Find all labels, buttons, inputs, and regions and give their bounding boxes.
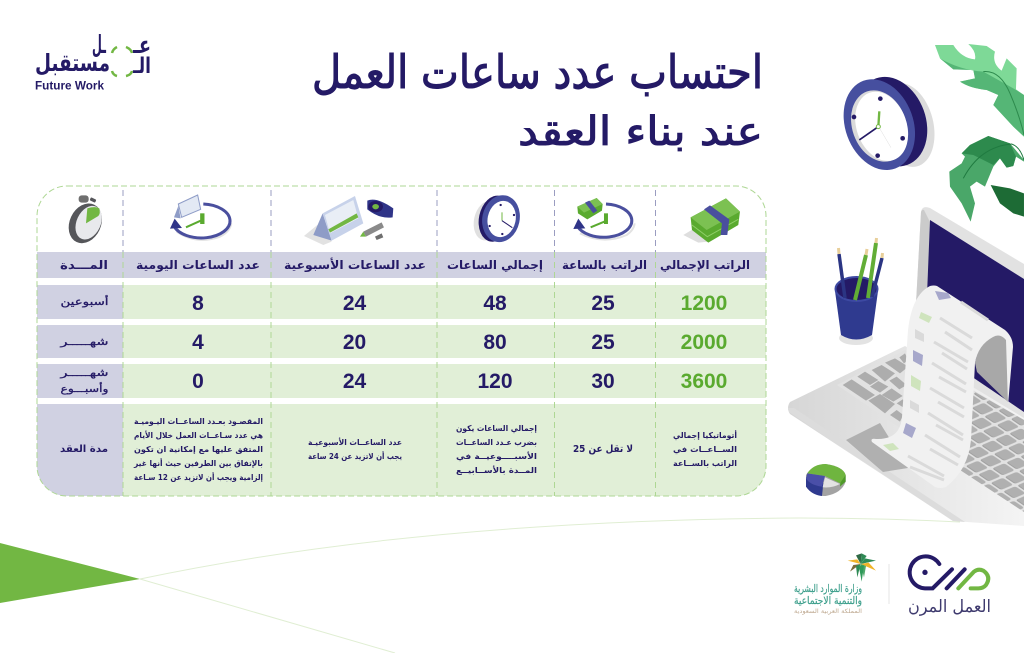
row: contract duration notes: أتوماتيكيا إجمالي — [673, 430, 737, 440]
row: month: 20 — [343, 331, 366, 354]
logo: ministry: المملكة العربية السعودية — [794, 608, 862, 615]
icon: daily hours calendar and arc — [170, 195, 231, 240]
row: contract duration notes: بالإتفاق بين الطرفين حيث أنها غير — [133, 458, 263, 468]
keyboard — [837, 350, 1024, 512]
title: عند بناء العقد — [518, 109, 763, 155]
logo: Future Work: Future Work — [35, 80, 105, 92]
row: two weeks — [60, 292, 727, 315]
icon: wall clock small — [470, 192, 524, 246]
row: month and week: 3600 — [681, 370, 727, 393]
logo: Future Work: عـ — [132, 31, 151, 59]
row: contract duration notes — [60, 417, 737, 482]
column headings: الراتب الإجمالي — [660, 258, 750, 272]
table panel — [37, 186, 766, 496]
row: month and week — [59, 368, 727, 395]
keys left of receipt — [843, 353, 908, 422]
laptop base — [788, 346, 1024, 526]
row: contract duration notes: الأسبــــوعيــة في — [456, 451, 537, 461]
row: contract duration notes: الراتب بالســاعة — [673, 459, 737, 468]
logo: Future Work — [35, 30, 151, 92]
row: month and week: 0 — [192, 370, 204, 393]
illustration: plant leaves — [935, 44, 1024, 222]
row: two weeks: 1200 — [681, 292, 727, 315]
row: contract duration notes: المقصـود بعـدد الساعــات اليـوميـة — [134, 417, 263, 426]
duration column background — [37, 285, 123, 496]
row: contract duration notes: يجب أن لاتزيد عن 24 ساعة — [308, 451, 402, 461]
row: month: شهـــــر — [59, 337, 108, 348]
row: month: 4 — [192, 331, 204, 354]
row: month: 80 — [483, 331, 507, 354]
logo: Future Work: مستقبل — [35, 49, 110, 77]
row: contract duration notes: لا تقل عن 25 — [573, 444, 633, 455]
logo: ministry: وزارة الموارد البشرية — [794, 583, 862, 595]
row: month — [59, 331, 727, 354]
row: contract duration notes: المتفق عليها مع إمكانية ان تكون — [134, 445, 263, 454]
row: contract duration notes: إلزامية ويجب أن لاتزيد عن 12 سـاعة — [134, 472, 263, 482]
logo: ministry — [794, 553, 876, 615]
row: two weeks: 25 — [591, 292, 615, 315]
row: contract duration notes: عدد الساعــات الأسبوعيـة — [308, 437, 402, 447]
row: month and week: 30 — [591, 370, 615, 393]
leaf: lower dark — [991, 185, 1024, 217]
column dashed dividers — [123, 190, 656, 496]
row: contract duration notes: مدة العقد — [60, 444, 108, 455]
logo: Future Work: الـ — [132, 54, 151, 79]
row: month and week: وأسبـــوع — [60, 382, 109, 395]
icon: palm — [848, 553, 876, 582]
leaf: top light — [935, 44, 1024, 137]
icon: weekly hours desk calendar — [304, 196, 393, 245]
row: contract duration notes: الســاعــات في — [673, 445, 737, 454]
title: احتساب عدد ساعات العمل — [312, 45, 763, 99]
logo: Future Work: ـل — [92, 30, 106, 59]
row: month and week: 24 — [343, 370, 366, 393]
decorative green triangle — [0, 543, 140, 603]
title — [312, 45, 763, 155]
illustration: pie chart — [806, 464, 846, 496]
icon: money stack — [683, 198, 740, 243]
receipt text lines — [908, 302, 988, 480]
row: contract duration notes: هي عدد سـاعــات العمل خلال الأيام — [134, 430, 263, 440]
column headings: إجمالي الساعات — [447, 258, 543, 272]
touchpad — [846, 423, 908, 472]
row: month: 2000 — [681, 331, 727, 354]
row: contract duration notes: المــدة بالأســابيــع — [456, 465, 537, 475]
row: two weeks: 8 — [192, 292, 204, 315]
header row background — [37, 252, 766, 278]
data rows background — [123, 285, 766, 496]
column headings — [60, 257, 750, 273]
icon: hourly wage money and arc — [573, 198, 635, 240]
row: month: 25 — [591, 331, 615, 354]
icon: stopwatch — [62, 195, 108, 249]
column headings: الراتب بالساعة — [562, 258, 647, 272]
row: month and week: 120 — [477, 370, 513, 393]
receipt colored squares — [883, 291, 951, 451]
column headings: عدد الساعات اليومية — [136, 258, 260, 273]
row: two weeks: 48 — [483, 292, 507, 315]
row: month and week: شهـــــر — [59, 368, 108, 379]
divider — [888, 564, 890, 604]
table dashed outline — [37, 186, 766, 496]
logo: flexible work: العمل المرن — [908, 597, 991, 617]
row: contract duration notes: إجمالي الساعات يكون — [456, 424, 537, 433]
row: two weeks: أسبوعين — [60, 295, 109, 308]
logo: flexible work — [908, 556, 991, 617]
illustration: laptop — [788, 207, 1024, 526]
illustration: wall clock — [831, 67, 943, 180]
illustration: paper receipt — [872, 286, 1013, 488]
row: contract duration notes: بضرب عـدد الساعــات — [456, 438, 537, 447]
logo: ministry: والتنمية الاجتماعية — [794, 595, 862, 607]
laptop screen — [914, 207, 1024, 440]
illustration: pencil cup — [835, 238, 882, 345]
column headings: المـــدة — [60, 258, 108, 272]
leaf: middle — [949, 136, 1024, 222]
row: two weeks: 24 — [343, 292, 366, 315]
column headings: عدد الساعات الأسبوعية — [284, 257, 426, 273]
